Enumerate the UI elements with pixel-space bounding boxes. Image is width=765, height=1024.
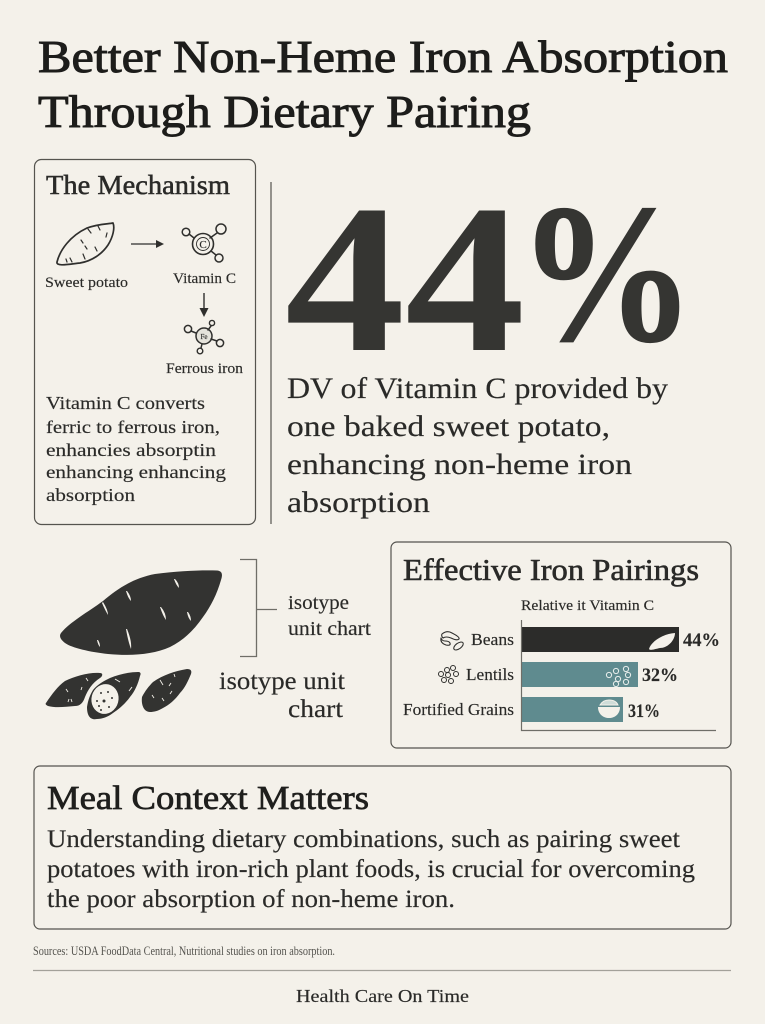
row label: lentils: Lentils [466,665,514,684]
bar: lentils [522,662,678,687]
row label: beans [441,630,514,650]
title: Through Dietary Pairing [38,86,531,137]
icon: sweet potato outline [57,223,114,265]
icon: small sweet potato right [142,669,191,712]
title: Better Non-Heme Iron Absorption [38,31,728,82]
statistic description: DV of Vitamin C provided by [287,373,668,405]
statistic description [287,373,668,519]
icon: large sweet potato [60,570,222,655]
panel: the mechanism [34,160,256,524]
bar: fortified grains: 31% [628,702,660,722]
meal context heading: Meal Context Matters [47,780,369,817]
meal context body: the poor absorption of non-heme iron. [47,886,455,913]
pairings heading: Effective Iron Pairings [403,552,699,587]
meal context body [47,826,696,913]
label: sweet potato: Sweet potato [45,275,128,291]
row label: beans: Beans [471,630,514,649]
bar chart [522,620,720,730]
big statistic: 44%: 44 [285,161,525,396]
meal context body: Understanding dietary combinations, such as pairing sweet [47,826,680,853]
row label: lentils [438,665,514,684]
statistic description: absorption [287,487,430,519]
icon: vitamin C molecule: C [199,239,207,251]
icon: vitamin C molecule [182,224,226,262]
icon: sweet potato cross-section [87,672,141,719]
panel: effective iron pairings [391,542,731,748]
label: isotype unit chart small [288,592,371,640]
icon: small sweet potato left [46,673,102,707]
label: isotype unit chart small: isotype [288,592,349,614]
label: isotype unit chart large: isotype unit [219,668,345,695]
bar: beans: 44% [683,631,720,651]
mechanism description: enhancing enhancing [46,462,226,482]
vertical divider [270,182,272,524]
mechanism description: enhancies absorptin [46,440,216,460]
bar: lentils: 32% [642,666,678,686]
statistic description: one baked sweet potato, [287,411,610,443]
label: isotype unit chart small: unit chart [288,618,371,640]
mechanism description [46,393,226,505]
mechanism description: ferric to ferrous iron, [46,417,220,437]
arrow: potato to vitamin C [131,240,164,248]
big statistic: 44%: % [518,164,696,383]
chart axes [522,620,716,730]
bar: fortified grains [522,697,660,722]
label: vitamin C: Vitamin C [173,271,236,287]
bracket [240,560,277,656]
chart subtitle: Relative it Vitamin C [521,598,654,614]
label: ferrous iron: Ferrous iron [166,361,244,377]
icon: ferrous iron molecule [184,320,224,354]
footer divider [33,970,731,972]
big statistic: 44% [285,161,696,396]
isotype chart: sweet potatoes [46,570,222,719]
mechanism description: Vitamin C converts [46,393,205,413]
arrow: vitamin C to ferrous iron [200,293,208,317]
mechanism description: absorption [46,485,135,505]
icon: ferrous iron molecule: Fe [200,333,208,341]
panel: meal context matters [34,766,731,929]
statistic description: enhancing non-heme iron [287,449,632,481]
bar: beans [522,627,720,652]
label: isotype unit chart large [219,668,345,723]
mechanism heading: The Mechanism [46,170,230,200]
row label: fortified grains: Fortified Grains [403,700,514,719]
meal context body: potatoes with iron-rich plant foods, is crucial for overcoming [47,856,696,883]
footer brand: Health Care On Time [296,986,469,1006]
title [38,31,728,137]
label: isotype unit chart large: chart [288,696,343,723]
sources: Sources: USDA FoodData Central, Nutritional studies on iron absorption. [33,943,335,958]
